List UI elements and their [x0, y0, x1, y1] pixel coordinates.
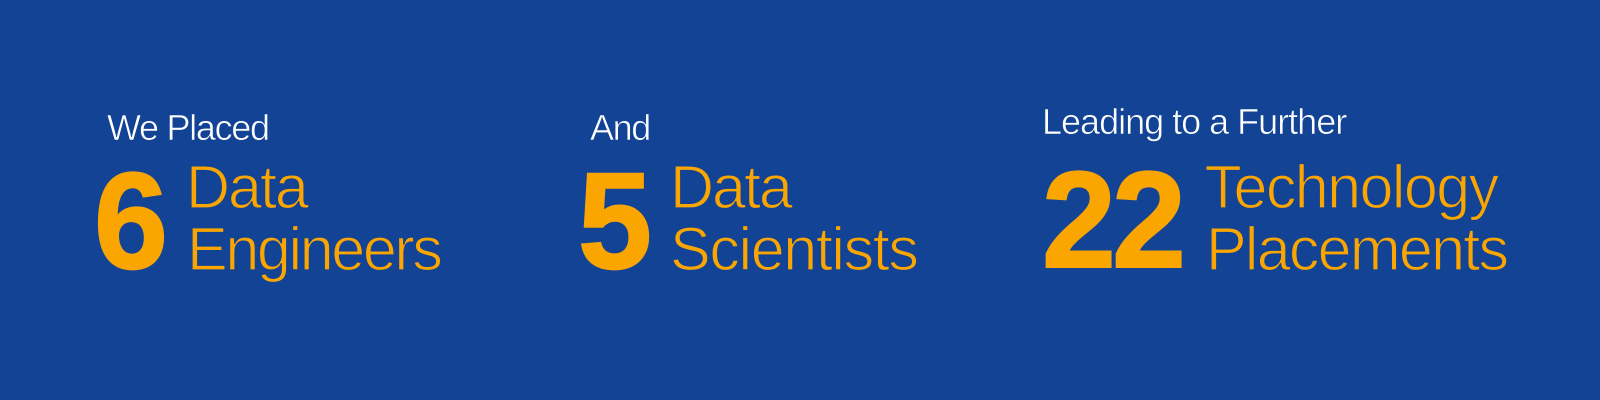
intro text: We Placed: We Placed: [107, 107, 269, 148]
big number 5: 5: [578, 145, 652, 298]
big number 22: 22: [1042, 144, 1182, 297]
label line: Technology: Technology: [1204, 153, 1498, 221]
label line: Data: Data: [186, 153, 307, 221]
label line: Engineers: Engineers: [187, 215, 441, 283]
label line: Data: Data: [670, 153, 791, 221]
intro text: Leading to a Further: Leading to a Further: [1042, 100, 1346, 142]
label line: Scientists: Scientists: [670, 215, 918, 283]
label line: Placements: Placements: [1206, 215, 1507, 283]
big number 6: 6: [94, 145, 167, 298]
intro text: And: And: [590, 107, 650, 148]
